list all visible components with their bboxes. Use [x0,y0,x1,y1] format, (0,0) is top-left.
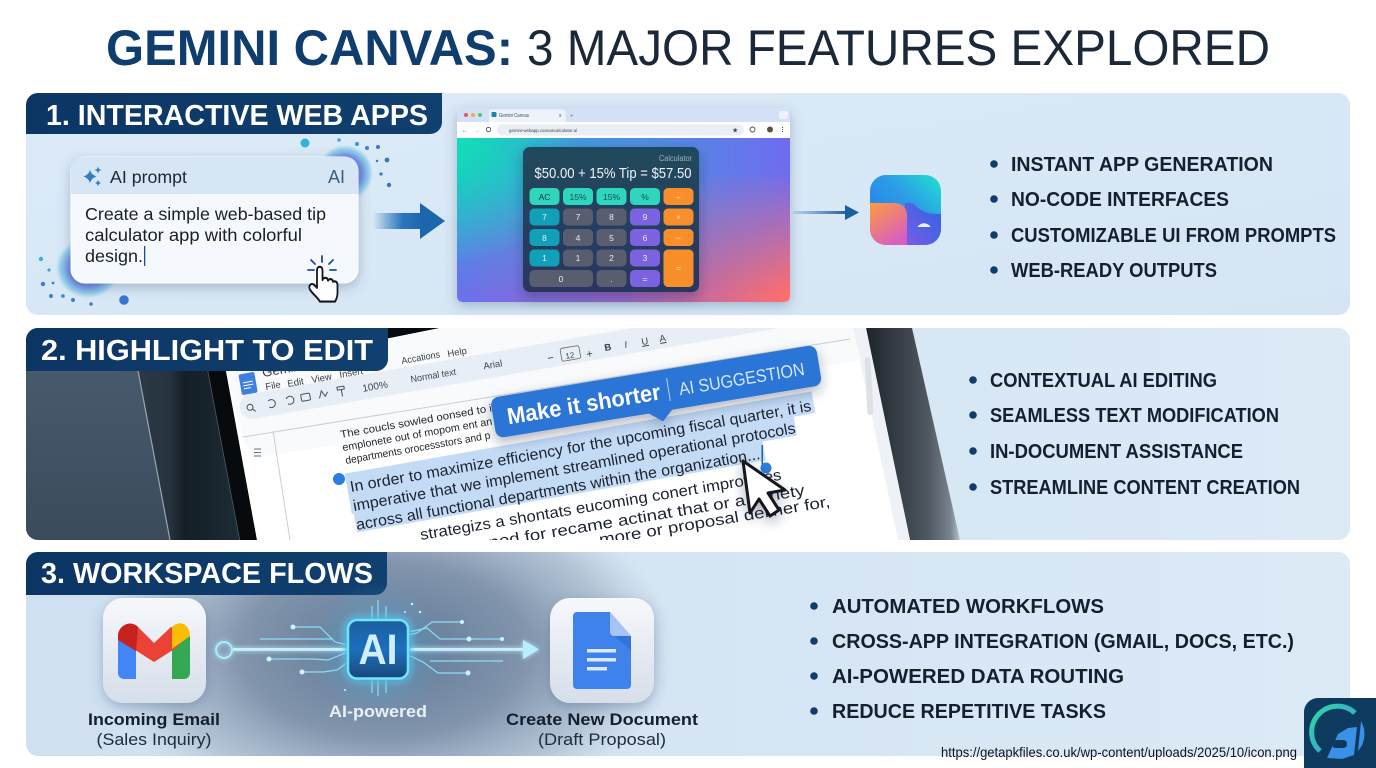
browser window: gemini-webapp.canvascalculator.ai [509,128,577,134]
arrow: app to icon [793,205,859,220]
list: section 2 features: IN-DOCUMENT ASSISTANCE [990,441,1243,463]
doc menus: I [624,340,628,351]
following body text: more or proposal deliner for, [598,494,831,549]
calculator: 9 [643,212,648,222]
doc menus: File [265,379,282,393]
icon: mouse cursor [743,461,785,516]
heading: section 3: 3. WORKSPACE FLOWS [41,558,373,590]
list: section 3 features: AUTOMATED WORKFLOWS [832,596,1104,618]
icon: sparkle [84,166,102,186]
list: section 3 features: REDUCE REPETITIVE TASKS [832,701,1106,723]
browser window: ← [462,128,468,134]
ai flow connector [216,582,539,718]
calculator: 7 [576,212,581,222]
list: section 2 features: CONTEXTUAL AI EDITING [990,370,1217,392]
doc menus [261,333,667,393]
list: section 1 features: INSTANT APP GENERATION [1011,154,1273,176]
doc menus: U [641,336,649,348]
browser window: x [559,113,562,119]
doc menus: B [604,342,612,354]
list: section 3 features: AI-POWERED DATA ROUTING [832,666,1124,688]
doc toolbar: Normal text [410,367,457,385]
label: incoming email: Incoming Email [88,710,220,729]
paragraph above selection: emplonete out of mopom ent an [341,416,493,454]
list: section 3 features: CROSS-APP INTEGRATION (GMAIL, DOCS, ETC.) [832,631,1294,653]
label: incoming email [88,710,220,749]
prompt card: design. [85,246,143,266]
heading: section 2: 2. HIGHLIGHT TO EDIT [41,335,373,367]
prompt card: calculator app with colorful [85,225,302,245]
highlighted text selection: In order to maximize efficiency for the upcoming fiscal quarter, it is [349,398,813,496]
calculator: % [641,192,649,202]
app gradient background [457,138,790,302]
list: section 1 features [990,154,1336,282]
doc menus: A [659,333,667,345]
dark glow backdrop [90,552,680,756]
calculator: − [676,233,681,243]
calculator: 15% [569,192,587,202]
calculator: 7 [542,212,547,222]
calculator: = [676,263,681,273]
document mockup [26,328,960,540]
doc menus: Accations [401,349,441,367]
prompt card: AI prompt [110,167,187,187]
prompt card [71,157,358,302]
label: create new document: (Draft Proposal) [538,730,666,749]
browser window: + [570,114,574,120]
list: section 3 features [810,596,1294,723]
list: section 2 features: STREAMLINE CONTENT CREATION [990,477,1300,499]
prompt card: Create a simple web-based tip [85,204,326,224]
calculator [523,147,699,292]
calculator: 1 [576,253,581,263]
calculator: = [643,274,648,284]
heading: section 3 [26,552,387,595]
browser window: ★ [732,126,738,134]
panel: interactive web apps [26,93,1350,315]
icon: hand cursor [308,256,338,302]
panel: workspace flows [26,552,1350,756]
doc side rail [243,339,850,540]
icon: docs small [238,372,258,395]
list: section 2 features: SEAMLESS TEXT MODIFICATION [990,405,1279,427]
doc toolbar: Arial [483,358,503,372]
title: GEMINI CANVAS: [106,20,513,76]
calculator: 5 [609,233,614,243]
doc toolbar [240,328,778,419]
highlighted text selection: across all functional departments within the organization... [355,446,761,534]
calculator: 8 [542,233,547,243]
browser window: Gemini Canvas [499,113,529,119]
paragraph above selection [340,404,492,464]
prompt card: AI [328,167,345,187]
icon: canvas app [870,175,941,245]
calculator: 8 [609,212,614,222]
doc menus: + [585,348,594,361]
icon: ai chip [348,620,408,678]
icon: corner logo [1304,698,1376,768]
calculator: 3 [643,253,648,263]
calculator: 6 [643,233,648,243]
label: ai-powered: AI-powered [329,702,427,721]
doc menus: View [311,372,333,386]
browser window: → [474,128,480,134]
icon: ai chip: AI [358,626,398,674]
heading: section 2 [26,328,388,371]
calculator: . [610,274,613,284]
calculator: 0 [559,274,564,284]
list: section 1 features: CUSTOMIZABLE UI FROM PROMPTS [1011,225,1336,247]
list: section 1 features: WEB-READY OUTPUTS [1011,260,1217,282]
calculator: AC [539,192,550,202]
popup: make it shorter: AI SUGGESTION [677,359,806,399]
label: incoming email: (Sales Inquiry) [96,730,212,749]
paragraph above selection: departments orocessstors and p [344,430,491,467]
browser window [457,108,790,302]
calculator: × [676,212,681,222]
calculator: 1 [542,253,547,263]
icon: gmail [103,598,206,703]
label: create new document: Create New Document [506,710,698,729]
doc toolbar: 100% [362,380,389,395]
highlighted text selection [333,391,822,534]
list: section 1 features: NO-CODE INTERFACES [1011,189,1229,211]
arrow: prompt to app [373,203,445,239]
paragraph above selection: The coucls sowled oonsed to in [339,401,499,441]
heading: section 1: 1. INTERACTIVE WEB APPS [46,100,428,132]
calculator: $50.00 + 15% Tip = $57.50 [534,166,692,182]
title: 3 MAJOR FEATURES EXPLORED [527,20,1270,76]
calculator: 4 [576,233,581,243]
doc menus: Insert [339,366,364,381]
panel: highlight to edit [26,328,1350,540]
calculator: 2 [609,253,614,263]
calculator: ÷ [676,192,681,202]
doc menus: Help [447,346,468,360]
icon: google docs [550,598,654,703]
list: section 2 features [969,370,1300,499]
doc menus: Gemini [261,358,304,380]
calculator: 15% [603,192,620,202]
doc menus: Edit [287,376,305,390]
popup: make it shorter [490,345,824,448]
particles behind prompt card [39,138,391,306]
title [106,20,1270,76]
following body text: lanned for recame actinat that or a variety [463,482,806,556]
calculator: Calculator [659,154,692,163]
highlighted text selection: imperative that we implement streamlined operational protocols [352,420,797,515]
doc menus: − [546,352,555,365]
following body text: strategizs a shontats eucoming conert improvises [419,467,783,544]
popup: make it shorter: Make it shorter [505,379,662,429]
doc menus: 12 [565,350,576,361]
label: create new document [506,710,698,749]
source url: https://getapkfiles.co.uk/wp-content/uploads/2025/10/icon.png [941,744,1297,760]
